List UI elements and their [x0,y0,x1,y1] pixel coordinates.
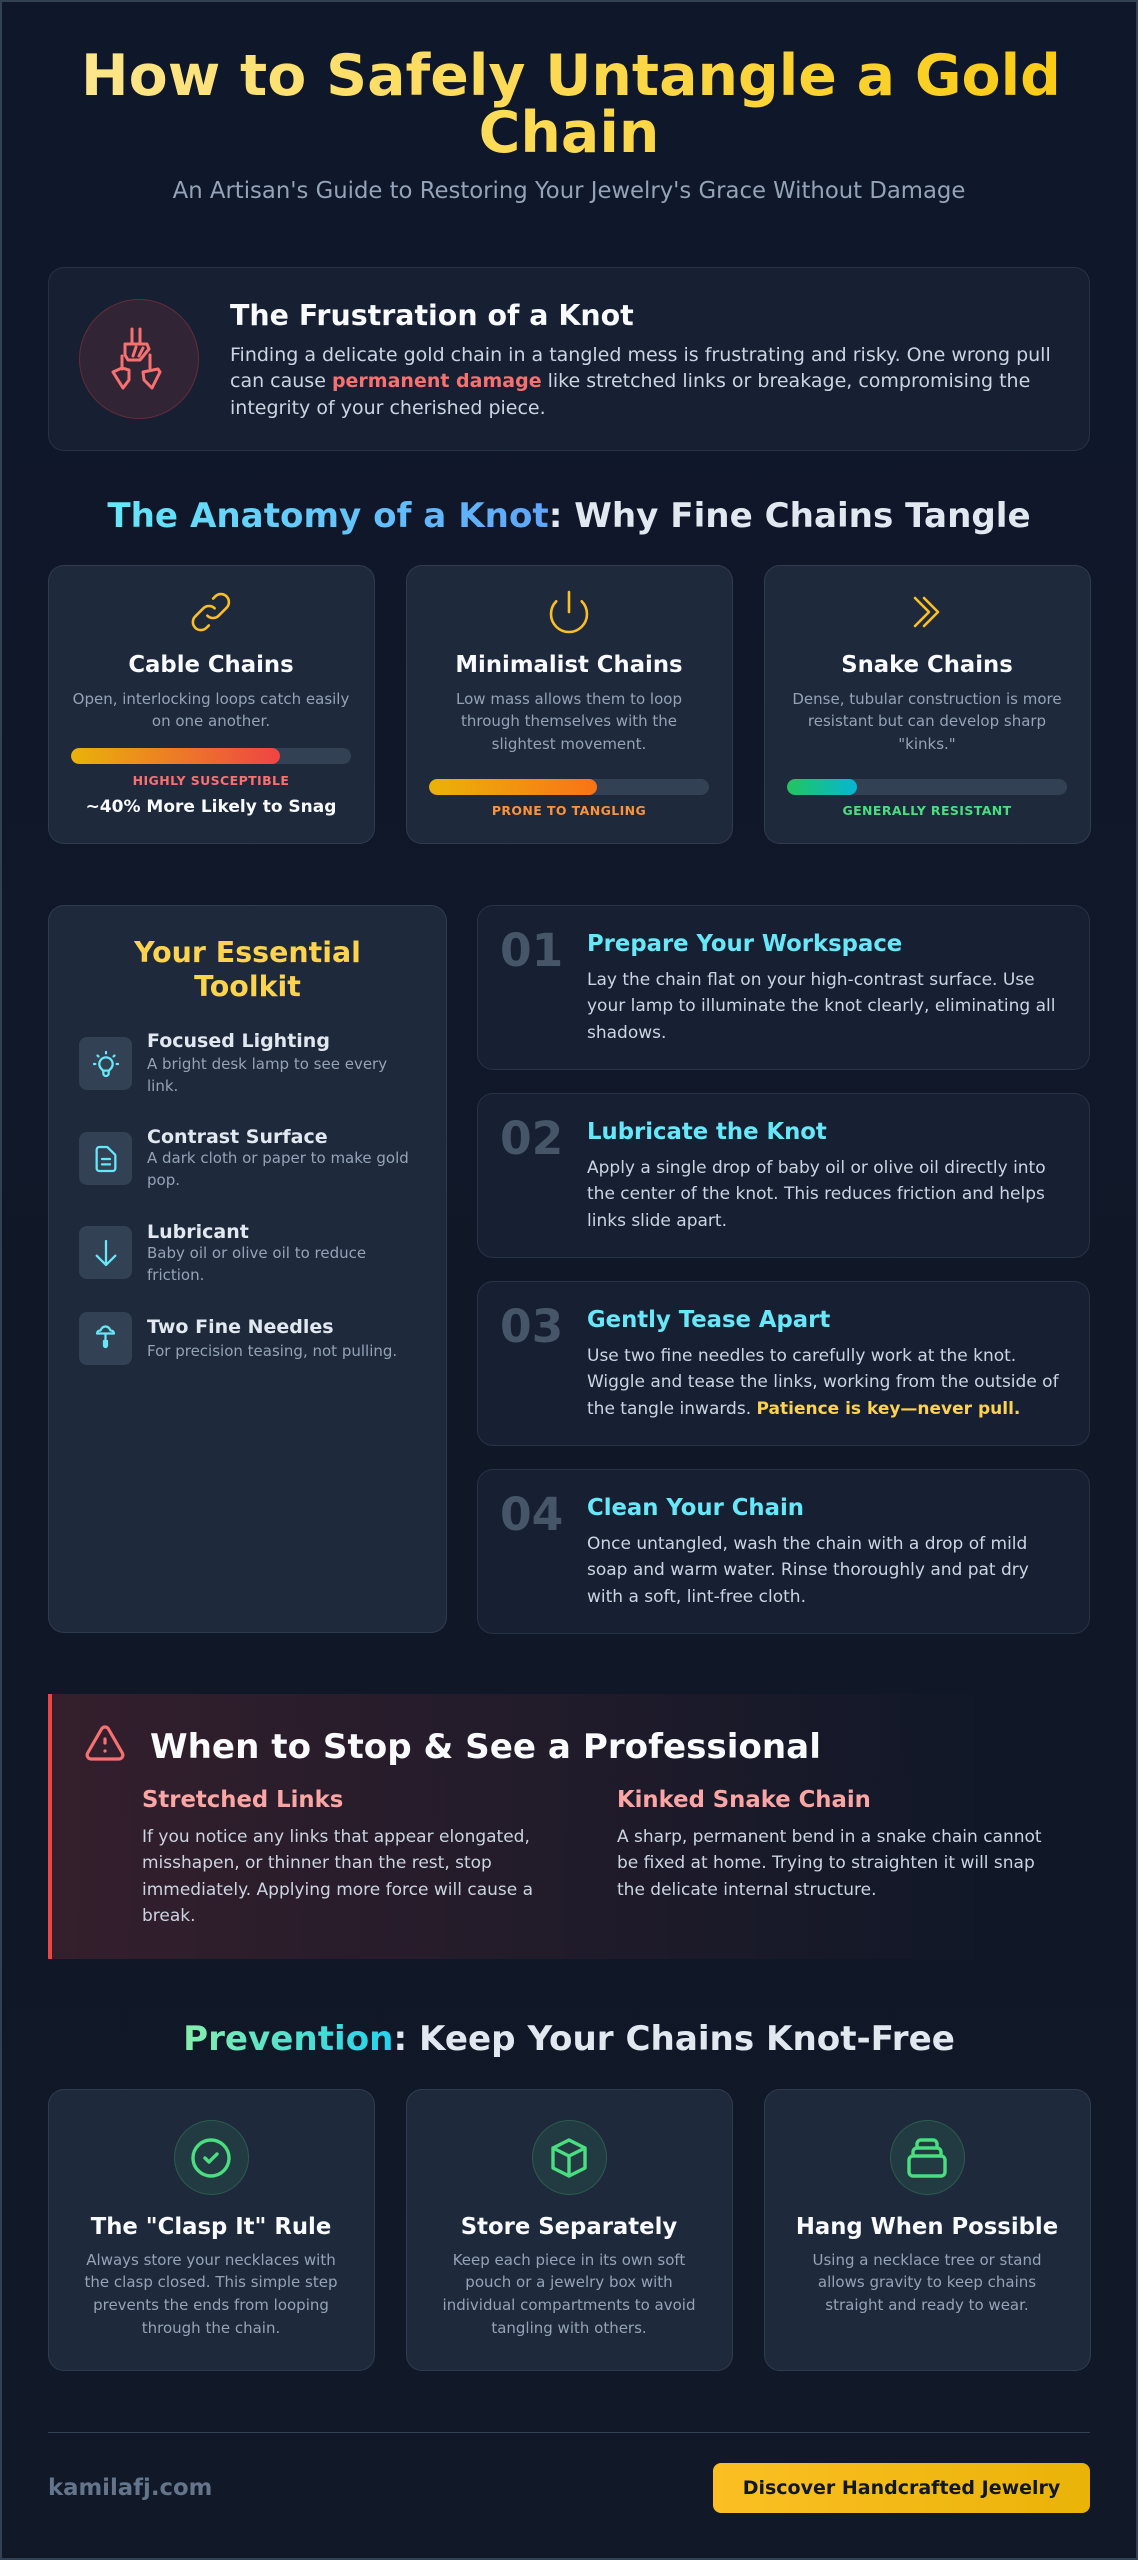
icon: stand [890,2120,964,2195]
number: 04 [500,1488,563,1541]
text: stretched links [142,1827,533,1926]
step text: Once untangled, wash the chain with a drop of mild [587,1534,1027,1554]
icon: document [79,1132,132,1185]
subheading: stretched links: Stretched Links [142,1787,343,1813]
step text [587,970,1055,1043]
button: discover: Discover Handcrafted Jewelry [743,2477,1060,2499]
text [792,690,1062,753]
step text: Lay the chain flat on your high-contrast surface. Use [587,970,1035,990]
text: individual compartments to avoid [443,2296,695,2314]
step title: Gently Tease Apart [587,1307,830,1333]
step text: soap and warm water. Rinse thoroughly and pat dry [587,1560,1029,1580]
icon: arrow down [79,1226,132,1279]
step text: Apply a single drop of baby oil or olive oil directly into [587,1158,1046,1178]
item: lubricant [79,1220,366,1284]
panel: essential toolkit [48,905,447,1633]
text: Low mass allows them to loop [456,690,682,708]
panel: step 02 [477,1093,1090,1258]
step text: with a soft, lint-free cloth. [587,1587,806,1607]
panel: hang when possible [764,2089,1090,2371]
step text [587,1346,1059,1419]
text [456,690,682,753]
panel: when to stop [48,1694,1090,1959]
text: frustration body [230,344,1051,419]
step text: shadows. [587,1023,666,1043]
step text: links slide apart. [587,1211,727,1231]
icon: light bulb [79,1037,132,1090]
step text: Use two fine needles to carefully work at the knot. [587,1346,1016,1366]
heading: Snake Chains [841,652,1013,678]
bar: 75 percent [71,748,351,764]
text: Keep each piece in its own soft [453,2251,685,2269]
item: two fine needles [79,1312,397,1365]
icon: needle [79,1312,132,1365]
text [73,690,349,730]
heading: Hang When Possible [796,2214,1058,2240]
footer brand: kamilafj.com [48,2475,212,2501]
heading: Cable Chains [128,652,294,678]
item text: friction. [147,1266,204,1284]
item text [147,1055,387,1095]
text: frustration body: can cause permanent damage like stretched links or breakage, compromising the [230,370,1030,392]
panel: step 03 [477,1281,1090,1446]
text: stretched links: misshapen, or thinner than the rest, stop [142,1853,492,1873]
step text: Wiggle and tease the links, working from the outside of [587,1372,1059,1392]
text: slightest movement. [492,735,646,753]
icon: knot in circle [79,299,199,419]
step text: your lamp to illuminate the knot clearly, eliminating all [587,996,1055,1016]
icon: power [550,590,588,634]
text: prevents the ends from looping [93,2296,329,2314]
title: How to Safely Untangle a Gold [81,43,1061,109]
label: HIGHLY SUSCEPTIBLE [133,773,289,788]
text: resistant but can develop sharp [808,712,1046,730]
item title: Focused Lighting [147,1030,330,1052]
text [443,2251,695,2337]
button: discover [713,2463,1090,2513]
stat: ~40% More Likely to Snag [86,797,336,817]
number: 03 [500,1300,563,1353]
text: frustration body: integrity of your cherished piece. [230,397,546,419]
step title: Prepare Your Workspace [587,931,902,957]
heading: professional: When to Stop & See a Professional [150,1727,821,1767]
text: kinked snake chain: the delicate internal structure. [617,1880,876,1900]
item title: Lubricant [147,1220,249,1242]
text: pouch or a jewelry box with [465,2273,673,2291]
label: GENERALLY RESISTANT [842,803,1012,818]
bar: 25 percent [787,779,1067,795]
panel: cable chains [48,565,374,844]
heading: toolkit: Your Essential [134,936,361,968]
heading: toolkit: Toolkit [194,970,301,1003]
item text: A dark cloth or paper to make gold [147,1149,409,1167]
text [84,2251,337,2337]
panel: store separately [406,2089,732,2371]
icon: box [532,2120,606,2195]
icon: link [192,592,230,632]
text: Open, interlocking loops catch easily [73,690,349,708]
step text [587,1534,1029,1607]
item text: link. [147,1077,178,1095]
text: the clasp closed. This simple step [85,2273,337,2291]
text: stretched links: If you notice any links that appear elongated, [142,1827,530,1847]
text: stretched links: break. [142,1906,196,1926]
heading: prevention: Prevention: Keep Your Chains Knot-Free [183,2019,955,2059]
text: stretched links: immediately. Applying more force will cause a [142,1880,533,1900]
panel: the frustration of a knot [48,267,1090,451]
item text: Baby oil or olive oil to reduce [147,1244,366,1262]
text: Using a necklace tree or stand [813,2251,1041,2269]
step title: Lubricate the Knot [587,1119,827,1145]
heading: The "Clasp It" Rule [91,2214,331,2240]
bar: 60 percent [429,779,709,795]
text: on one another. [152,712,270,730]
subheading: kinked snake chain: Kinked Snake Chain [617,1787,871,1813]
text: through the chain. [142,2319,280,2337]
heading: anatomy of a knot: The Anatomy of a Knot: Why Fine Chains Tangle [107,496,1031,536]
icon: double chevron [914,596,940,628]
text: straight and ready to wear. [825,2296,1029,2314]
item title: Two Fine Needles [147,1316,334,1338]
text: kinked snake chain: be fixed at home. Trying to straighten it will snap [617,1853,1035,1873]
panel: step 04 [477,1469,1090,1634]
item: focused lighting [79,1030,387,1095]
title [81,48,1057,162]
panel: snake chains [764,565,1090,844]
panel: minimalist chains [406,565,732,844]
item text [147,1149,409,1189]
item text: A bright desk lamp to see every [147,1055,387,1073]
text: Always store your necklaces with [86,2251,336,2269]
label: PRONE TO TANGLING [492,803,646,818]
text [813,2251,1041,2314]
text: kinked snake chain [617,1827,1042,1900]
text: through themselves with the [461,712,677,730]
icon: warning triangle [86,1725,124,1761]
number: 02 [500,1112,563,1165]
step text: the tangle inwards. Patience is key—never pull. [587,1399,1020,1419]
title: Chain [479,100,659,166]
text: Dense, tubular construction is more [792,690,1062,708]
item text: For precision teasing, not pulling. [147,1342,397,1360]
heading: toolkit [134,936,361,1003]
heading: frustration: The Frustration of a Knot [230,299,634,332]
subtitle: An Artisan's Guide to Restoring Your Jewelry's Grace Without Damage [173,178,965,204]
panel: step 01 [477,905,1090,1070]
item title: Contrast Surface [147,1126,328,1148]
text: tangling with others. [491,2319,647,2337]
item: contrast surface [79,1126,409,1189]
text: kinked snake chain: A sharp, permanent bend in a snake chain cannot [617,1827,1042,1847]
heading: Minimalist Chains [455,652,683,678]
text: frustration body: Finding a delicate gold chain in a tangled mess is frustrating and risky. One wrong pull [230,344,1051,366]
step text [587,1158,1046,1231]
panel: clasp it rule [48,2089,374,2371]
step text: the center of the knot. This reduces friction and helps [587,1184,1045,1204]
text: "kinks." [898,735,956,753]
number: 01 [500,924,563,977]
item text: pop. [147,1171,180,1189]
heading: Store Separately [461,2214,677,2240]
icon: check circle [174,2120,248,2195]
item text [147,1244,366,1284]
step title: Clean Your Chain [587,1495,804,1521]
text: allows gravity to keep chains [818,2273,1036,2291]
